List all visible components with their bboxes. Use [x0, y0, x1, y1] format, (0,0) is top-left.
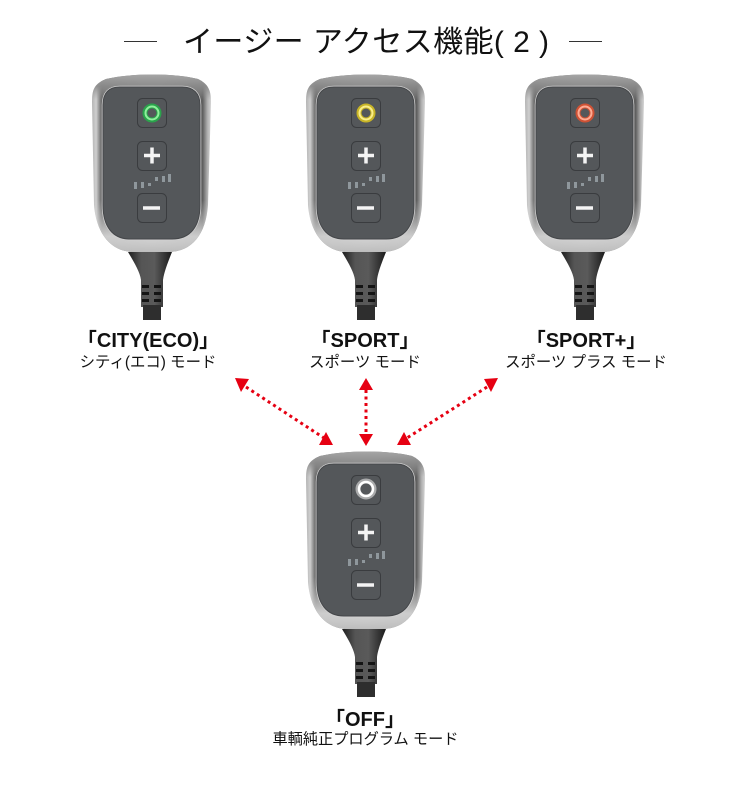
- label: CITY (ECO): シティ(エコ) モード: [80, 354, 216, 371]
- label: SPORT+: 「SPORT+」: [526, 329, 646, 352]
- label: SPORT: 「SPORT」: [311, 329, 419, 352]
- device: OFF mode, white indicator: [306, 452, 425, 697]
- arrow: SPORT to OFF: [359, 378, 373, 446]
- label: OFF: 「OFF」: [325, 708, 405, 731]
- label: OFF: [272, 708, 459, 748]
- title: イージー アクセス機能( 2 ): [183, 26, 549, 59]
- device: CITY (ECO) mode, green indicator: [92, 74, 211, 320]
- label: SPORT+: スポーツ プラス モード: [505, 353, 667, 371]
- arrow: CITY to OFF: [235, 378, 333, 445]
- device: SPORT mode, yellow indicator: [306, 74, 425, 320]
- label: OFF: 車輌純正プログラム モード: [272, 731, 459, 748]
- label: SPORT+: [505, 329, 667, 371]
- label: SPORT: [309, 329, 421, 371]
- device: SPORT+ mode, red indicator: [525, 74, 644, 320]
- label: SPORT: スポーツ モード: [309, 353, 421, 371]
- label: CITY (ECO): 「CITY(ECO)」: [77, 329, 219, 352]
- arrow: SPORT+ to OFF: [397, 378, 498, 445]
- label: CITY (ECO): [77, 329, 219, 371]
